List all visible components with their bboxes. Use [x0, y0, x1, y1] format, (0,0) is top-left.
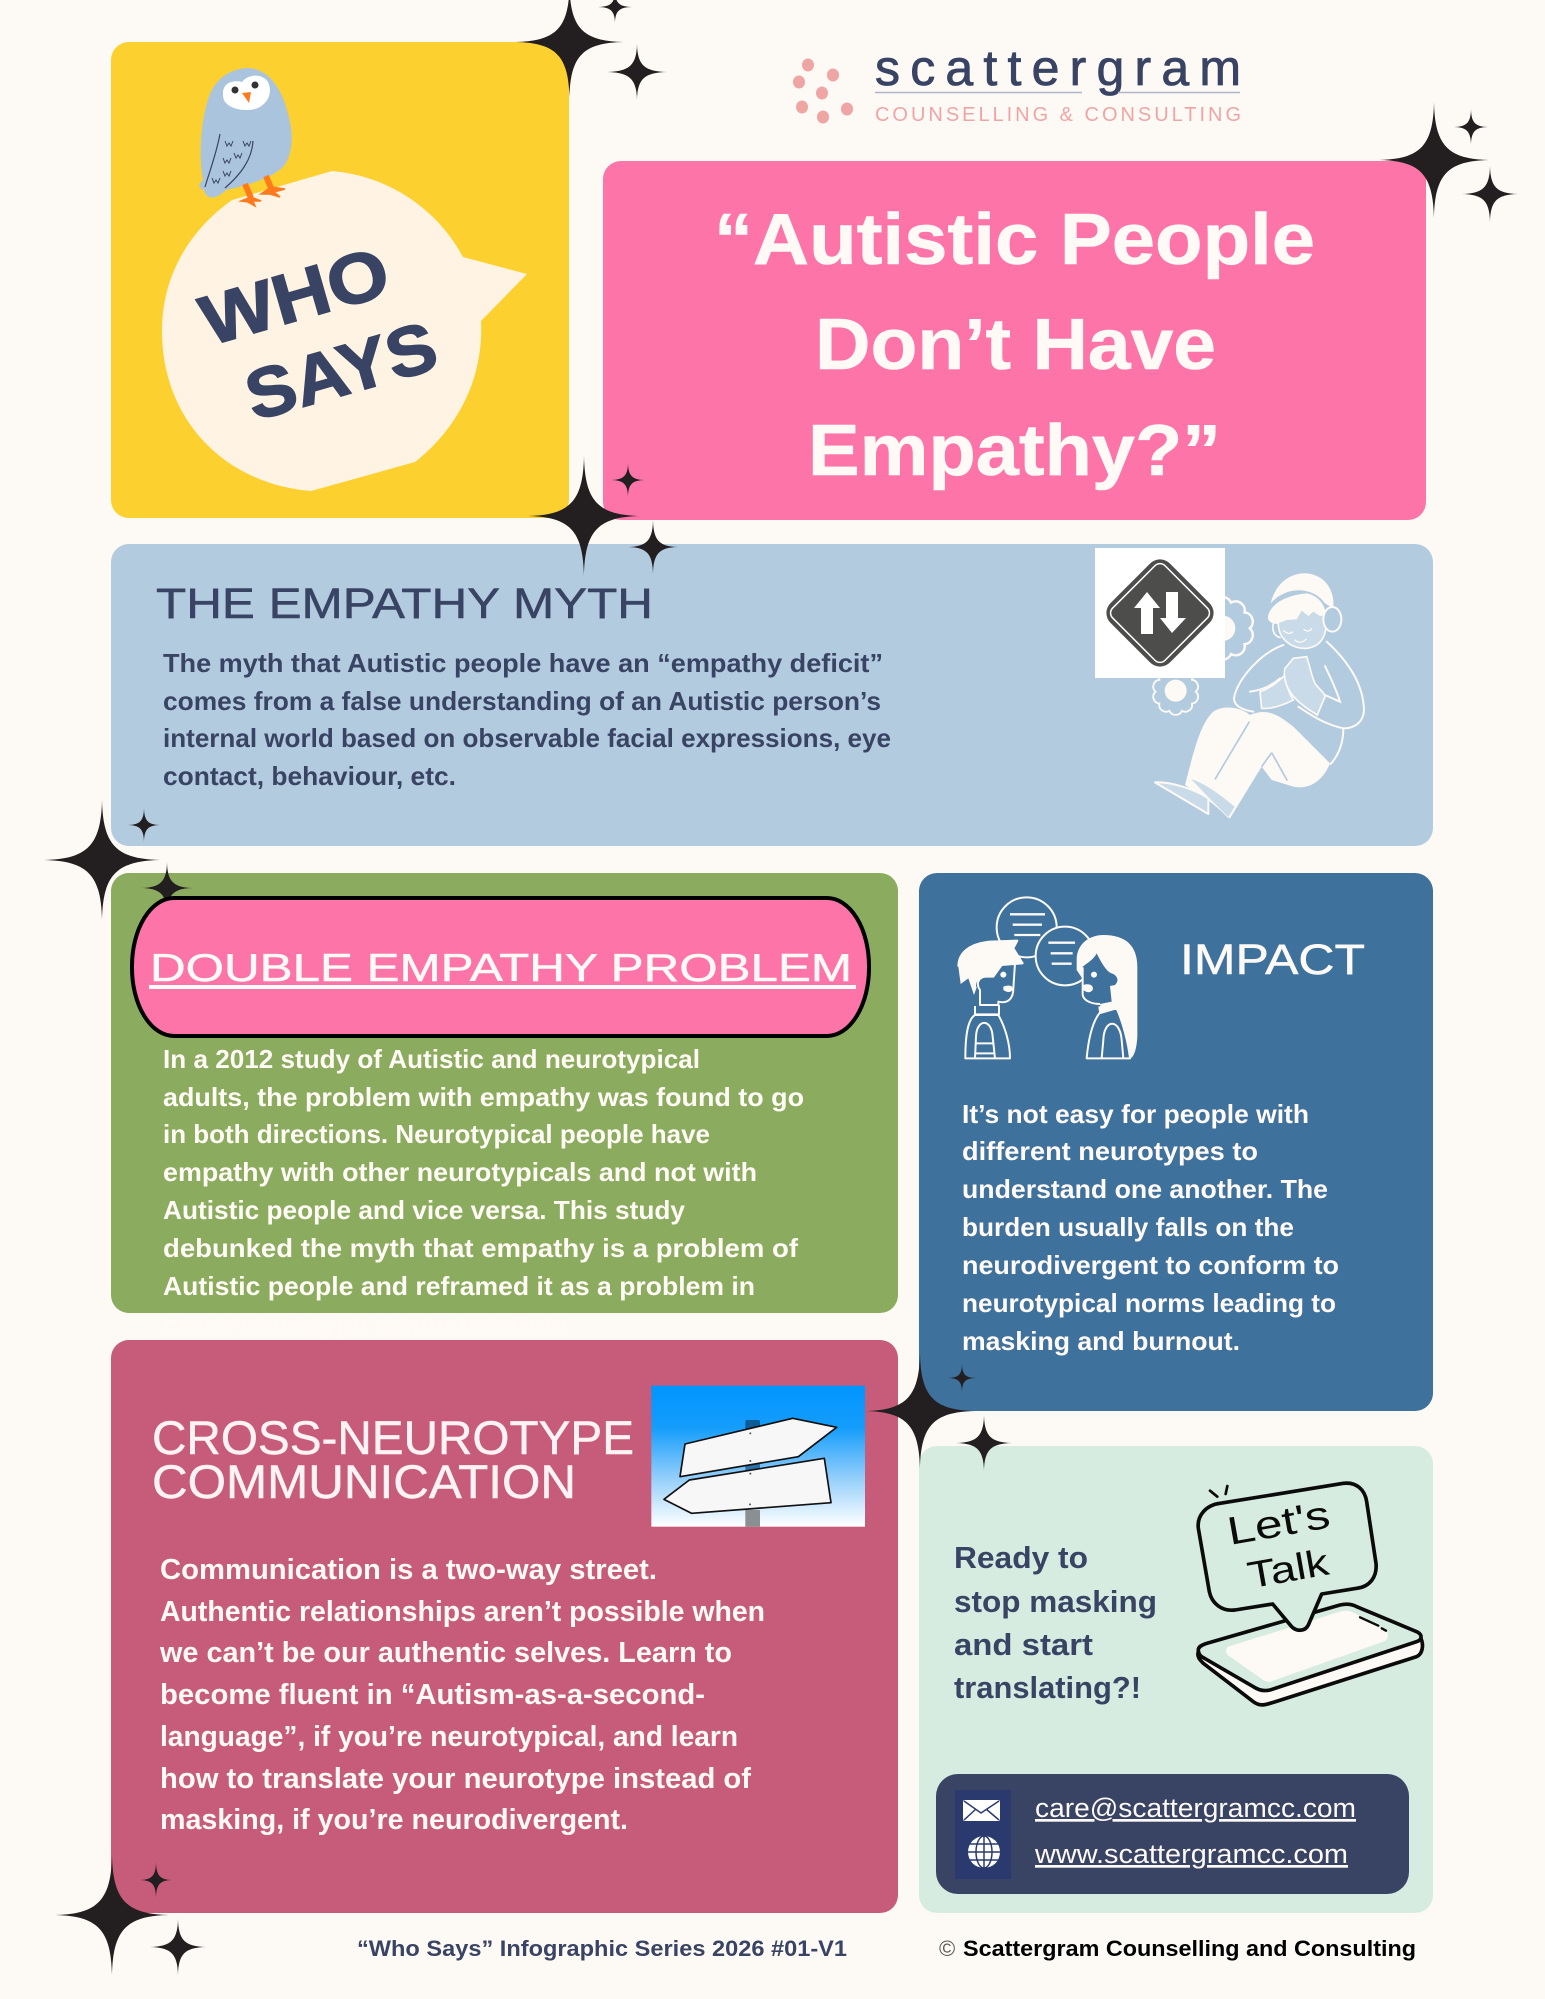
call to action text: [954, 1540, 1157, 1705]
heading: IMPACT: [1180, 936, 1365, 984]
sparkles: left cluster: [44, 800, 193, 920]
who says text: [192, 233, 446, 435]
body text: Communication is a two-way street.: [160, 1554, 657, 1586]
body text: how to translate your neurotype instead of: [160, 1763, 751, 1795]
icon: lets talk phone: Talk: [1244, 1541, 1332, 1596]
body text: Autistic people and reframed it as a problem in: [163, 1271, 755, 1301]
who says text: WHO: [192, 233, 398, 360]
contact links: [1034, 1793, 1356, 1869]
body text: burden usually falls on the: [962, 1212, 1294, 1242]
body text: contact, behaviour, etc.: [163, 761, 456, 791]
contact box: [936, 1774, 1409, 1894]
who says text: SAYS: [237, 307, 446, 435]
panel: cross-neurotype communication: [111, 1340, 898, 1913]
panel: who says: [111, 42, 569, 518]
heading: [152, 1411, 634, 1508]
icon: lets talk phone: Let's: [1224, 1493, 1333, 1554]
sparkles: bottom cluster: [55, 1855, 206, 1975]
contact links: care@scattergramcc.com: [1035, 1793, 1356, 1823]
icon: two people talking: [958, 897, 1137, 1058]
sparkles: middle cluster: [528, 456, 678, 576]
body text: empathy with other neurotypicals and not with: [163, 1157, 757, 1187]
contact links: www.scattergramcc.com: [1034, 1839, 1348, 1869]
body text: become fluent in “Autism-as-a-second-: [160, 1679, 705, 1711]
call to action text: Ready to: [954, 1540, 1088, 1575]
title text: Don’t Have: [815, 305, 1216, 385]
body text: The myth that Autistic people have an “empathy deficit”: [163, 648, 883, 678]
body text: [159, 1554, 765, 1836]
footer: copyright: ©: [939, 1936, 955, 1961]
body text: [163, 1044, 804, 1339]
speech bubble: [162, 171, 527, 491]
panel: title: [603, 161, 1426, 520]
panel: double empathy problem: [111, 873, 898, 1339]
panel: impact: [919, 873, 1433, 1411]
body text: in both directions. Neurotypical people have: [163, 1119, 710, 1149]
yellow panel background: [111, 42, 569, 518]
logo wordmark: scattergram: [875, 40, 1241, 96]
title text: [714, 200, 1315, 491]
logo dots: [793, 58, 853, 124]
heading: THE EMPATHY MYTH: [156, 580, 653, 628]
title text: “Autistic People: [714, 200, 1315, 280]
body text: In a 2012 study of Autistic and neurotypical: [163, 1044, 700, 1074]
panel: the empathy myth: [111, 544, 1433, 846]
sparkles: top cluster: [516, 0, 667, 100]
heading: COMMUNICATION: [152, 1455, 576, 1508]
logo tagline: COUNSELLING & CONSULTING: [875, 104, 1241, 126]
body text: Autistic people and vice versa. This study: [163, 1195, 686, 1225]
body text: adults, the problem with empathy was found to go: [163, 1082, 804, 1112]
body text: neurodivergent to conform to: [962, 1250, 1339, 1280]
icon: two-way traffic sign: [1095, 548, 1225, 678]
call to action text: translating?!: [954, 1670, 1141, 1705]
heading: CROSS-NEUROTYPE: [152, 1411, 634, 1464]
body text: masking, if you’re neurodivergent.: [160, 1804, 628, 1836]
image: signpost: [651, 1386, 865, 1527]
body text: different neurotypes to: [962, 1136, 1258, 1166]
body text: masking and burnout.: [962, 1326, 1240, 1356]
title text: Empathy?”: [808, 411, 1221, 491]
logo: scattergram: [793, 40, 1241, 126]
sparkles: header right cluster: [1379, 102, 1518, 222]
footer: copyright: Scattergram Counselling and Consulting: [963, 1936, 1416, 1961]
body text: we can’t be our authentic selves. Learn to: [159, 1637, 732, 1669]
call to action text: stop masking: [954, 1584, 1157, 1619]
body text: internal world based on observable facial expressions, eye: [163, 723, 891, 753]
body text: Authentic relationships aren’t possible when: [160, 1596, 765, 1628]
body text: comes from a false understanding of an Autistic person’s: [163, 686, 881, 716]
icon: lets talk phone: [1198, 1483, 1422, 1705]
call to action text: and start: [954, 1627, 1093, 1662]
body text: [962, 1099, 1339, 1356]
sparkles: right middle cluster: [865, 1353, 1012, 1471]
body text: understand one another. The: [962, 1174, 1328, 1204]
footer: series label: “Who Says” Infographic Series 2026 #01-V1: [357, 1936, 847, 1961]
body text: debunked the myth that empathy is a problem of: [163, 1233, 798, 1263]
body text: neurotypical norms leading to: [962, 1288, 1336, 1318]
body text: cross-neurotype communication: [163, 1309, 567, 1339]
body text: language”, if you’re neurotypical, and learn: [160, 1721, 738, 1753]
body text: It’s not easy for people with: [962, 1099, 1309, 1129]
body text: [163, 648, 891, 791]
icon: owl: [199, 68, 292, 206]
contact icons: [955, 1790, 1011, 1879]
panel: ready to stop masking: [919, 1446, 1433, 1913]
icon: meditating person: [1153, 573, 1364, 818]
heading pill: double empathy problem: [132, 898, 869, 1036]
heading pill: double empathy problem: DOUBLE EMPATHY PROBLEM: [150, 947, 852, 990]
